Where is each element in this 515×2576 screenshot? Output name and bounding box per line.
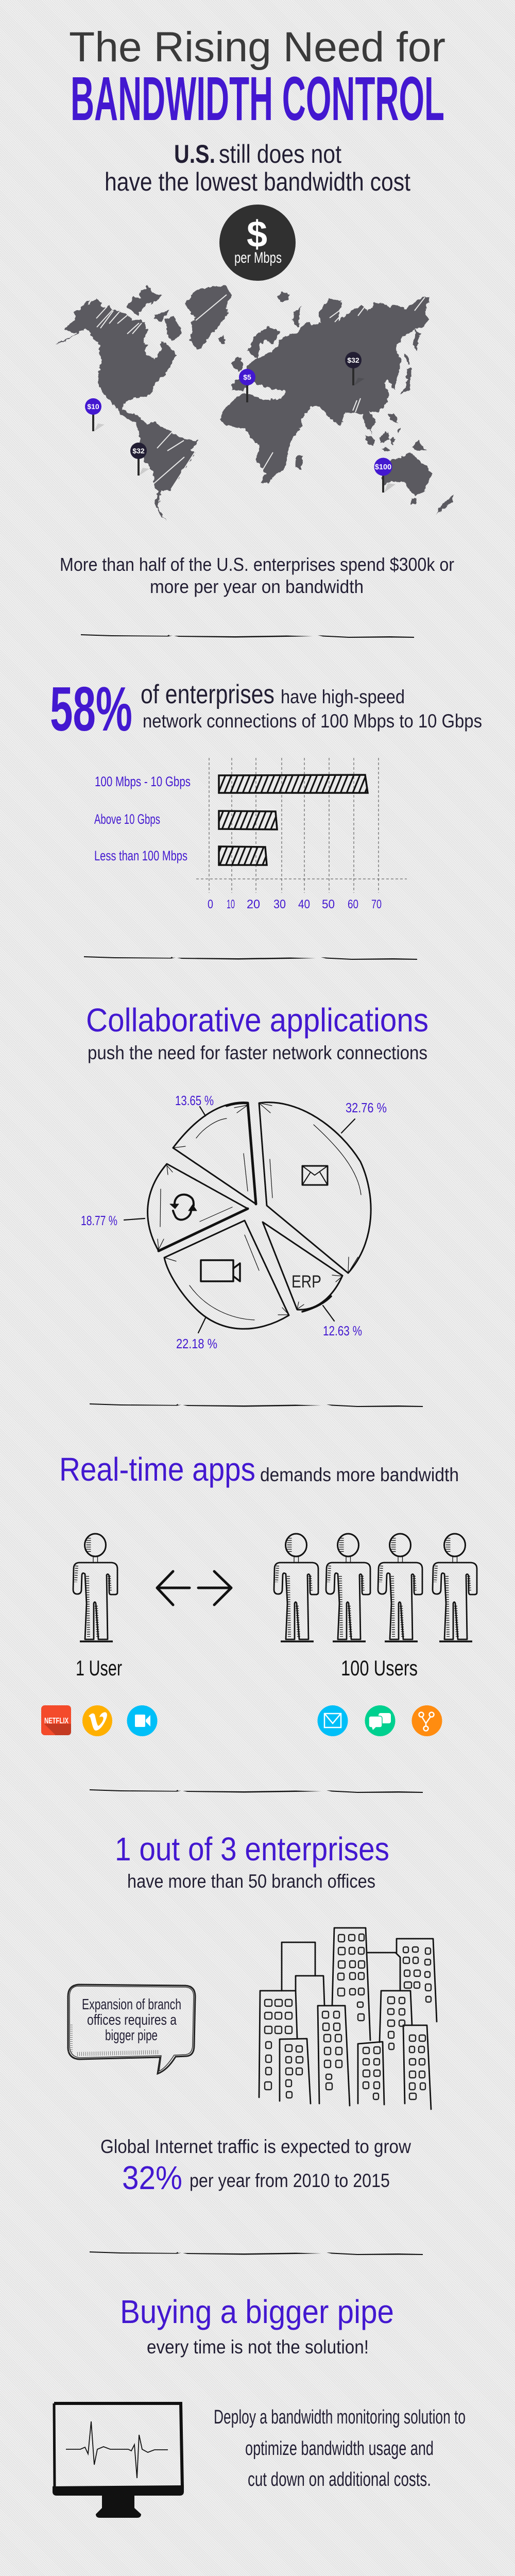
heading: U.S. bandwidth cost: have the lowest bandwidth cost [105,167,410,196]
pin: $5 Europe [239,369,255,402]
stat: global internet traffic growth: Global Internet traffic is expected to grow [100,2136,411,2157]
slice: sync 18.77% [148,1164,248,1251]
heading: collaborative applications: Collaborative applications [86,1002,428,1039]
heading: U.S. bandwidth cost: U.S. [174,140,215,168]
axis labels: 60 [348,897,358,911]
icon: two-way arrows [157,1571,231,1605]
callout text [82,1996,181,2044]
axis labels: 70 [371,897,382,911]
label: 1 User: 1 User [76,1656,122,1680]
axis labels [208,897,382,911]
icon: mail [317,1705,348,1736]
heading: collaborative applications [86,1002,428,1063]
stat: 58% of enterprises: network connections of 100 Mbps to 10 Gbps [143,710,482,732]
heading: buying a bigger pipe [120,2293,394,2358]
heading: collaborative applications: push the need for faster network connections [88,1042,427,1063]
leader lines [124,1107,355,1333]
heading: 1 out of 3 enterprises: 1 out of 3 enterprises [115,1831,389,1868]
slice: 13.65% [173,1103,256,1204]
slice: email 32.76% [259,1103,371,1273]
heading: 1 out of 3 enterprises [115,1831,389,1892]
text: deploy monitoring: cut down on additional costs. [248,2469,431,2490]
bar: less than 100 Mbps [219,846,267,865]
illustration: city buildings [259,1928,437,2109]
pin: $32 Asia [345,352,365,385]
bar: 100 Mbps - 10 Gbps [219,775,368,793]
icon: workflow [412,1705,442,1736]
heading: real-time apps [59,1451,459,1488]
category labels: Above 10 Gbps [94,811,160,827]
heading: 1 out of 3 enterprises: have more than 50 branch offices [127,1871,375,1892]
heading: buying a bigger pipe: every time is not the solution! [147,2336,369,2358]
bar: above 10 Gbps [219,811,277,829]
icon: dollar per Mbps badge: $ [247,214,267,255]
stat: global internet traffic growth [100,2136,411,2196]
callout text: Expansion of branch [82,1996,181,2013]
heading: real-time apps: Real-time apps [59,1451,255,1488]
bar chart: connection speeds [94,758,407,911]
pin: $32 Asia: $32 [347,356,359,364]
pie labels: 32.76 % [346,1100,387,1115]
figures: hundred users [274,1534,477,1641]
label: 100 Users: 100 Users [341,1656,418,1680]
title: The Rising Need for [69,24,445,71]
callout: speech bubble [68,1985,195,2074]
pin: $10 North America [85,398,105,431]
title [69,24,445,133]
callout text: bigger pipe [105,2027,158,2044]
pin: $100 Australia: $100 [375,463,391,471]
pin: $10 North America: $10 [87,402,99,411]
text: U.S. enterprise spend: more per year on bandwidth [150,576,364,597]
heading: real-time apps: demands more bandwidth [260,1464,459,1485]
heading: U.S. bandwidth cost [105,140,410,196]
pin: $32 South America: $32 [132,447,145,455]
pin: $5 Europe: $5 [243,373,251,381]
category labels: 100 Mbps - 10 Gbps [95,774,191,789]
icon: Vimeo [82,1705,112,1736]
slice: video 22.18% [164,1221,289,1329]
icon: video call [127,1705,158,1736]
icon: Netflix [41,1705,71,1735]
label: ERP: ERP [291,1272,321,1292]
stat: 58% of enterprises: have high-speed [281,686,405,707]
pie labels: 13.65 % [175,1093,214,1108]
axis labels: 0 [208,897,213,911]
axis labels: 40 [298,897,310,911]
heading: U.S. bandwidth cost: still does not [219,140,341,168]
heading: buying a bigger pipe: Buying a bigger pipe [120,2293,394,2330]
stat: global internet traffic growth: per year from 2010 to 2015 [190,2170,390,2191]
stat: global internet traffic growth: 32% [122,2159,182,2196]
pin: $100 Australia [374,457,396,493]
pin: $32 South America [130,443,149,476]
icon: monitor with pulse [53,2403,184,2518]
icon: dollar per Mbps badge [219,205,296,281]
stat: 58% of enterprises: 58% [50,674,132,744]
axis labels: 30 [273,897,286,911]
axis labels: 10 [227,897,235,911]
stat: 58% of enterprises [50,674,482,744]
slice: ERP 12.63% [263,1222,342,1312]
pie labels [81,1093,387,1351]
icon: chat [365,1705,396,1736]
category labels: Less than 100 Mbps [94,848,187,863]
icon: Netflix: NETFLIX [44,1717,68,1725]
pie labels: 18.77 % [81,1213,117,1228]
axis labels: 50 [322,897,335,911]
callout text: offices requires a [87,2012,177,2028]
text: deploy monitoring [214,2406,466,2490]
text: U.S. enterprise spend [60,554,454,597]
axis labels: 20 [247,897,260,911]
text: U.S. enterprise spend: More than half of the U.S. enterprises spend $300k or [60,554,454,575]
pie chart: application share [81,1093,387,1351]
figure: one user [73,1534,117,1641]
icon: dollar per Mbps badge: per Mbps [234,249,282,266]
pie labels: 12.63 % [323,1323,362,1338]
stat: 58% of enterprises: of enterprises [141,680,274,709]
category labels [94,774,191,863]
pie labels: 22.18 % [176,1336,217,1351]
text: deploy monitoring: optimize bandwidth usage and [245,2438,434,2460]
world map [56,285,453,519]
